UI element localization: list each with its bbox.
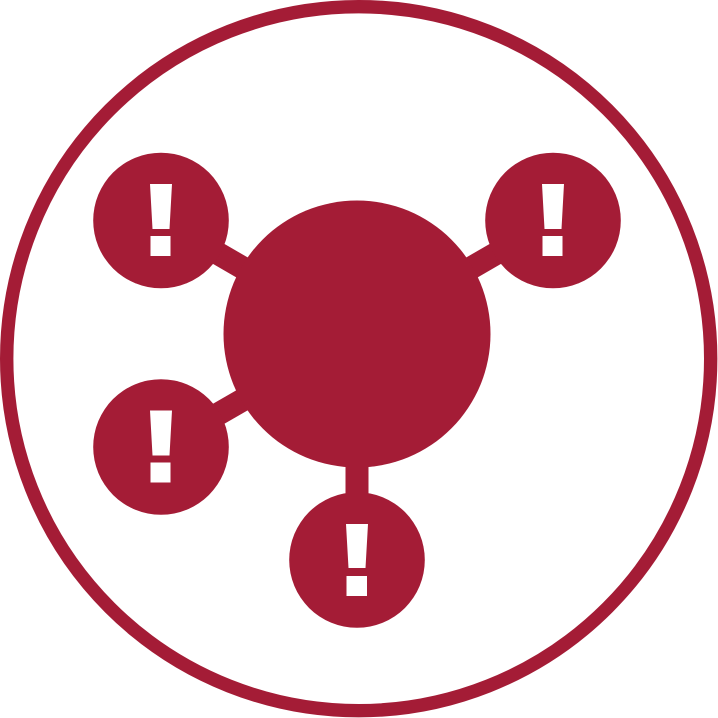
connector: top right (357, 220, 553, 334)
connector: bottom (346, 334, 368, 560)
alert node: top right (485, 153, 621, 288)
alert node: top left (93, 153, 229, 288)
connector: lower left (161, 334, 357, 447)
alert node: bottom (289, 492, 425, 628)
central hub circle (224, 200, 490, 468)
connector: top left (161, 220, 357, 334)
alert node: lower left (93, 379, 229, 515)
